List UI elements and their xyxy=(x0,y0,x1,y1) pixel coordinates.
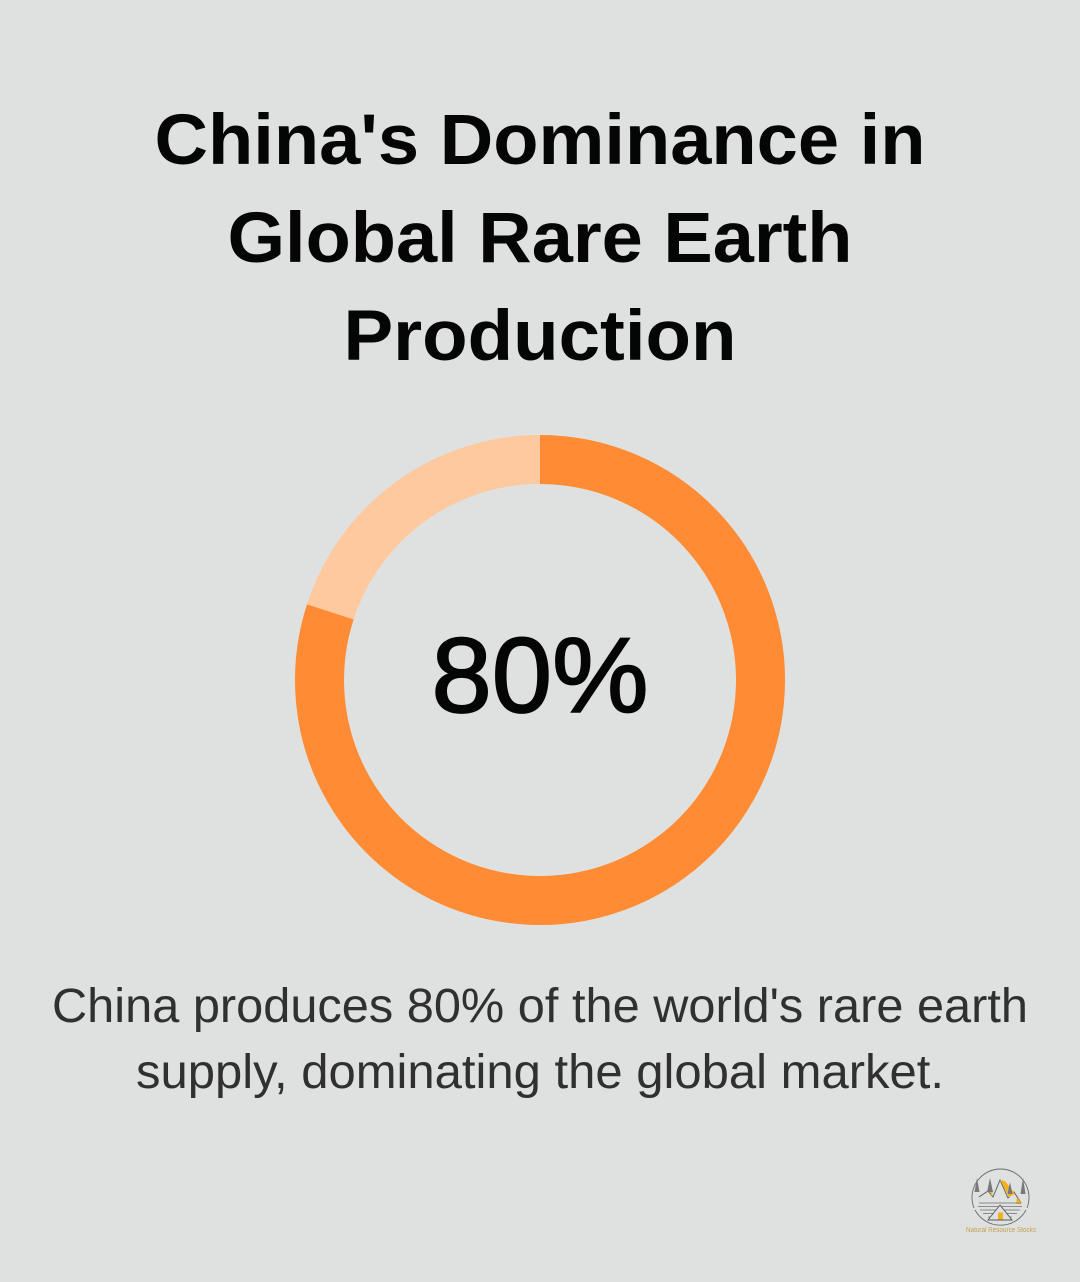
logo caption: Natural Resource Stocks xyxy=(966,1227,1036,1234)
title xyxy=(154,101,926,376)
title: Global Rare Earth xyxy=(228,199,852,278)
chart track: remaining 20% xyxy=(320,460,760,900)
chart segment: China 80% xyxy=(320,460,761,901)
title: Production xyxy=(344,297,736,376)
logo trees xyxy=(974,1178,1026,1194)
title: China's Dominance in xyxy=(154,101,926,180)
description text xyxy=(52,980,1028,1099)
description text: supply, dominating the global market. xyxy=(136,1046,944,1099)
logo: Natural Resource Stocks xyxy=(966,1169,1036,1234)
logo ring xyxy=(972,1169,1029,1225)
logo water lines xyxy=(978,1203,1022,1217)
logo mountains xyxy=(979,1180,1021,1203)
logo cabin xyxy=(988,1205,1012,1220)
donut chart: 80% share xyxy=(320,460,761,901)
description text: China produces 80% of the world's rare earth xyxy=(52,980,1028,1033)
center value: 80% xyxy=(432,615,648,735)
